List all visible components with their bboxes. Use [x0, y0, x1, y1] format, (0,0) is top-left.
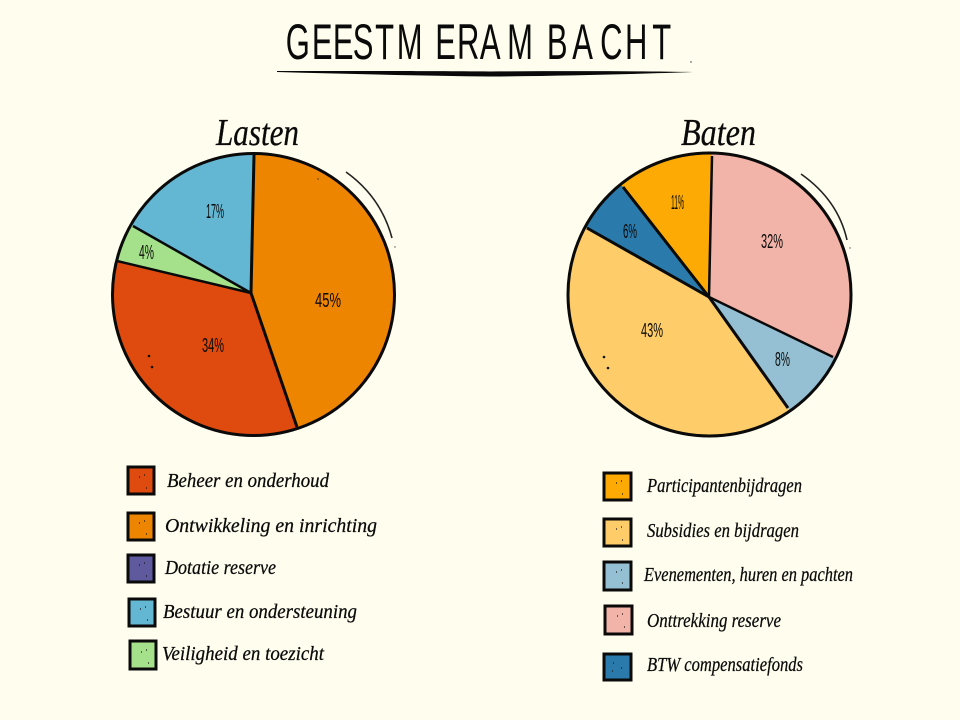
- legend item: bestuur en ondersteuning: Bestuur en ondersteuning: [163, 601, 357, 623]
- pie chart: baten: 6%: [623, 221, 637, 243]
- legend item: participantenbijdragen: [604, 473, 802, 500]
- legend item: dotatie reserve: Dotatie reserve: [164, 557, 276, 579]
- legend item: onttrekking reserve: [605, 606, 781, 634]
- legend item: veiligheid en toezicht: Veiligheid en toezicht: [162, 643, 324, 665]
- legend item: dotatie reserve: [128, 555, 276, 582]
- pie chart: baten: 43%: [641, 320, 663, 342]
- legend item: bestuur en ondersteuning: [129, 599, 357, 626]
- legend item: evenementen, huren en pachten: Evenementen, huren en pachten: [643, 564, 853, 586]
- legend item: veiligheid en toezicht: [130, 641, 324, 669]
- legend item: btw compensatiefonds: [604, 654, 803, 680]
- legend item: btw compensatiefonds: BTW compensatiefonds: [647, 654, 803, 676]
- legend item: subsidies en bijdragen: [604, 519, 799, 546]
- title: GEESTMERAMBACHT: [286, 13, 671, 70]
- pie chart: baten: 32%: [761, 231, 783, 253]
- pie chart: lasten: [111, 152, 396, 437]
- pie chart: lasten: 17%: [206, 201, 224, 223]
- panel: baten: [566, 120, 852, 682]
- pie chart: baten: 11%: [671, 192, 684, 214]
- legend: lasten: [128, 467, 377, 669]
- legend item: evenementen, huren en pachten: [604, 562, 853, 590]
- legend item: ontwikkeling en inrichting: [128, 513, 377, 540]
- pie chart: lasten: 4%: [139, 242, 154, 264]
- heading: lasten: Lasten: [215, 112, 299, 154]
- legend item: participantenbijdragen: Participantenbijdragen: [646, 475, 802, 497]
- heading: baten: Baten: [681, 112, 756, 154]
- legend item: onttrekking reserve: Onttrekking reserve: [647, 610, 781, 632]
- panel: lasten: [111, 120, 396, 670]
- pie chart: baten: 8%: [775, 349, 790, 371]
- legend item: beheer en onderhoud: Beheer en onderhoud: [167, 470, 330, 492]
- pie chart: lasten: 34%: [202, 335, 224, 357]
- legend item: ontwikkeling en inrichting: Ontwikkeling en inrichting: [165, 515, 377, 537]
- pie chart: baten: [566, 152, 852, 438]
- legend: baten: [604, 473, 853, 680]
- pie chart: lasten: 45%: [315, 290, 341, 312]
- legend item: beheer en onderhoud: [128, 467, 330, 494]
- legend item: subsidies en bijdragen: Subsidies en bijdragen: [647, 520, 799, 542]
